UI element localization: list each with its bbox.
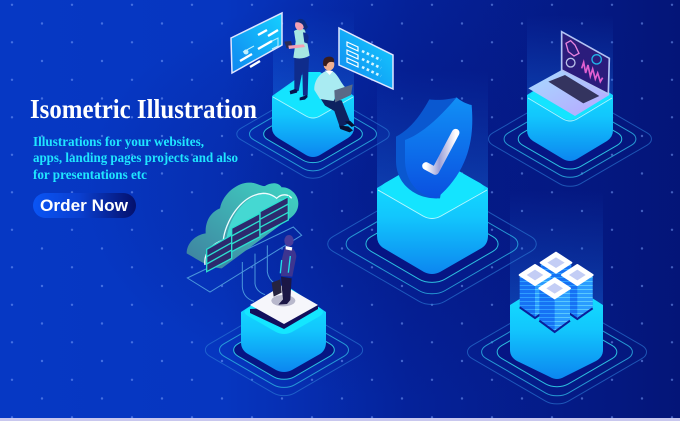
platform: laptop [482,72,658,190]
person: man in suit with briefcase [271,235,296,306]
icon: shield [396,97,472,198]
cube [272,72,354,157]
base plate and wires [187,227,302,301]
cloud with servers [187,183,302,301]
description text: Illustrations for your websites, [33,135,204,150]
description text: for presentations etc [33,168,147,183]
left tower [520,265,551,318]
order button: Order Now [40,196,129,215]
floating panel: list [339,28,393,89]
floating panel: flow chart [231,13,282,73]
cube [377,160,488,274]
cube [510,280,603,379]
person: standing woman [284,19,310,100]
check mark [426,133,456,171]
light beams [273,10,613,310]
rings [199,301,369,399]
rings [461,296,653,408]
icon: server towers [520,253,593,332]
description text: apps, landing pages projects and also [33,151,238,166]
order button [33,193,136,218]
platform: people [231,72,395,182]
title: Isometric Illustration [30,94,257,124]
rings [482,88,658,190]
cloud body [187,183,298,268]
icon: laptop [528,32,609,116]
rings [231,86,395,182]
back tower [541,253,571,305]
server stacks [207,197,288,272]
right tower [562,265,593,319]
description text [33,135,238,183]
cube [527,72,613,161]
platform: shield [320,159,544,309]
platform: servers [461,280,653,408]
rings [320,179,544,309]
person: seated man with laptop [314,57,355,132]
bright inner arch [227,194,288,250]
platform: cloud worker [199,285,369,399]
cube [241,288,326,372]
white plate [250,305,318,329]
front tower [539,278,570,332]
